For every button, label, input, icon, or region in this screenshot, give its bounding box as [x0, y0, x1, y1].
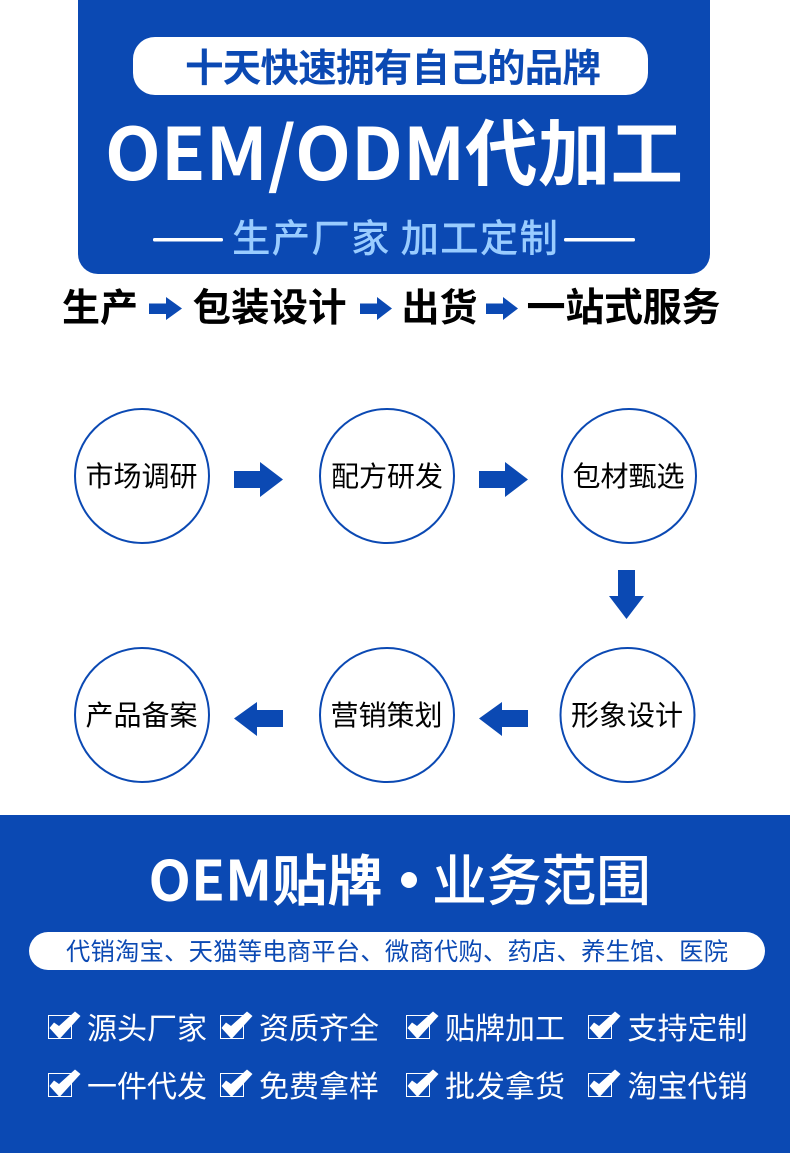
step: shipping: 出货: [402, 277, 478, 332]
arrow: [149, 297, 182, 320]
arrow right: [479, 462, 528, 497]
feature: private label: 贴牌加工: [445, 1004, 565, 1048]
feature: dropshipping: 一件代发: [87, 1062, 207, 1106]
arrow right: [234, 462, 283, 497]
step: production: 生产: [62, 277, 138, 332]
node: image design: [560, 648, 694, 782]
feature: free samples: 免费拿样: [259, 1062, 379, 1106]
channels pill: 代销淘宝、天猫等电商平台、微商代购、药店、养生馆、医院: [66, 932, 728, 967]
section heading: [148, 836, 651, 916]
feature: taobao distribution: 淘宝代销: [628, 1062, 748, 1106]
panel: top header: [78, 0, 710, 274]
node: packaging selection: [562, 409, 696, 543]
service chain line: [62, 277, 720, 333]
node: image design: 形象设计: [571, 694, 683, 734]
arrow left: [479, 702, 528, 736]
node: formula development: [320, 409, 454, 543]
subtitle with rules: 生产厂家 加工定制: [232, 208, 558, 264]
subtitle with rules: [153, 208, 635, 264]
feature: source factory: 源头厂家: [87, 1004, 207, 1048]
node: product filing: [75, 648, 209, 782]
panel: business scope: [0, 815, 790, 1153]
step: one-stop service: 一站式服务: [526, 277, 720, 333]
arrow: [486, 297, 518, 320]
node: product filing: 产品备案: [85, 694, 198, 734]
node: market research: 市场调研: [85, 455, 198, 495]
step: packaging design: 包装设计: [192, 277, 346, 333]
node: marketing planning: [320, 648, 454, 782]
title: OEM/ODM代加工: [105, 96, 683, 201]
node: marketing planning: 营销策划: [330, 694, 443, 734]
feature: customization: 支持定制: [628, 1004, 748, 1048]
feature: full qualification: 资质齐全: [259, 1004, 379, 1048]
section heading: 业务范围: [432, 836, 651, 916]
node: market research: [75, 409, 209, 543]
heading pill: 十天快速拥有自己的品牌: [185, 38, 601, 94]
arrow down: [609, 570, 644, 619]
flow diagram: [75, 409, 696, 782]
arrow left: [234, 702, 283, 736]
node: packaging selection: 包材甄选: [572, 455, 685, 495]
node: formula development: 配方研发: [331, 455, 443, 495]
arrow: [360, 297, 392, 320]
feature: wholesale: 批发拿货: [445, 1062, 565, 1106]
section heading: OEM贴牌: [148, 836, 382, 916]
